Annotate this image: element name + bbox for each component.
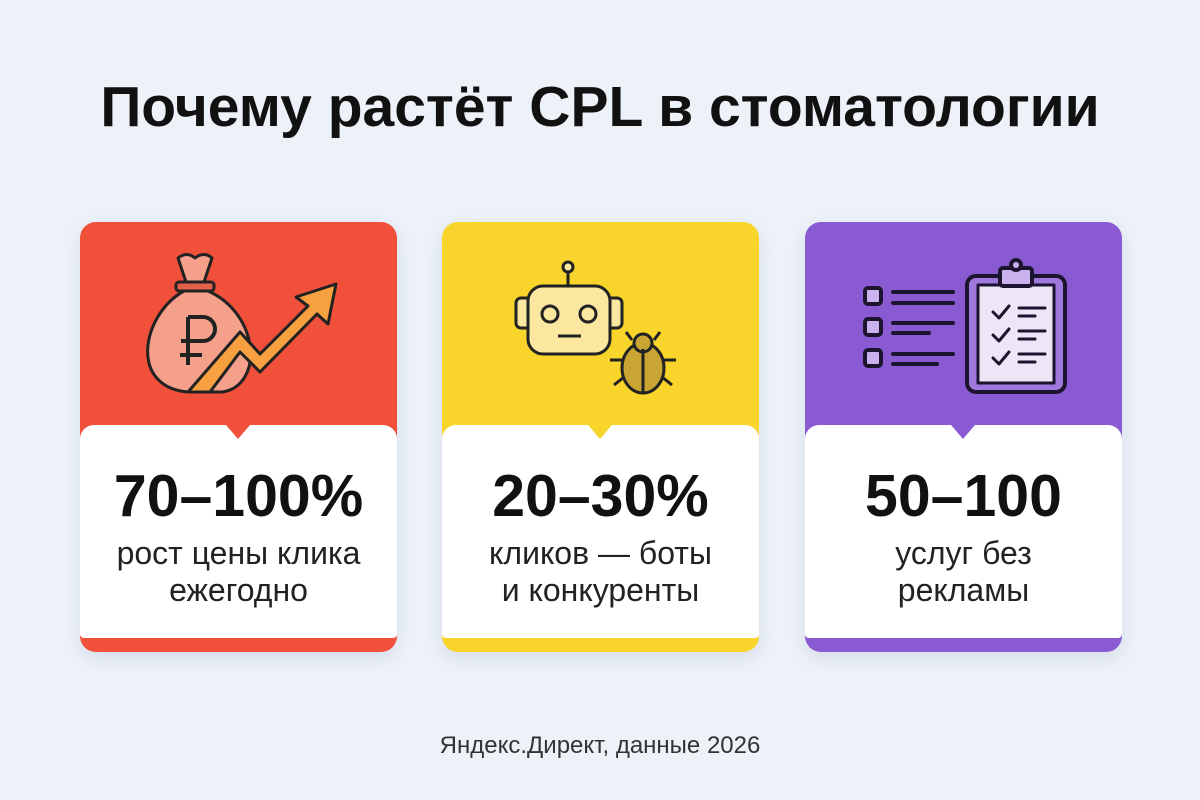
panel: click price xyxy=(80,222,397,652)
caption: и конкуренты xyxy=(502,572,699,608)
stat: 70–100% xyxy=(114,463,363,529)
caption xyxy=(117,535,360,608)
title: Почему растёт CPL в стоматологии xyxy=(100,75,1100,139)
caption xyxy=(489,535,712,608)
arrow notch xyxy=(226,425,250,439)
caption: кликов — боты xyxy=(489,535,712,571)
caption: ежегодно xyxy=(169,572,308,608)
icon: money bag with arrow xyxy=(146,253,338,394)
stat: 20–30% xyxy=(492,463,709,529)
caption: услуг без xyxy=(895,535,1032,571)
caption: рекламы xyxy=(898,572,1029,608)
footer source: Яндекс.Директ, данные 2026 xyxy=(440,732,760,759)
panel: services xyxy=(805,222,1122,652)
panel: bots xyxy=(442,222,759,652)
icon: robot and bug xyxy=(514,260,676,394)
caption xyxy=(895,535,1032,608)
stat: 50–100 xyxy=(865,463,1062,529)
icon: list and clipboard xyxy=(863,258,1067,394)
caption: рост цены клика xyxy=(117,535,360,571)
